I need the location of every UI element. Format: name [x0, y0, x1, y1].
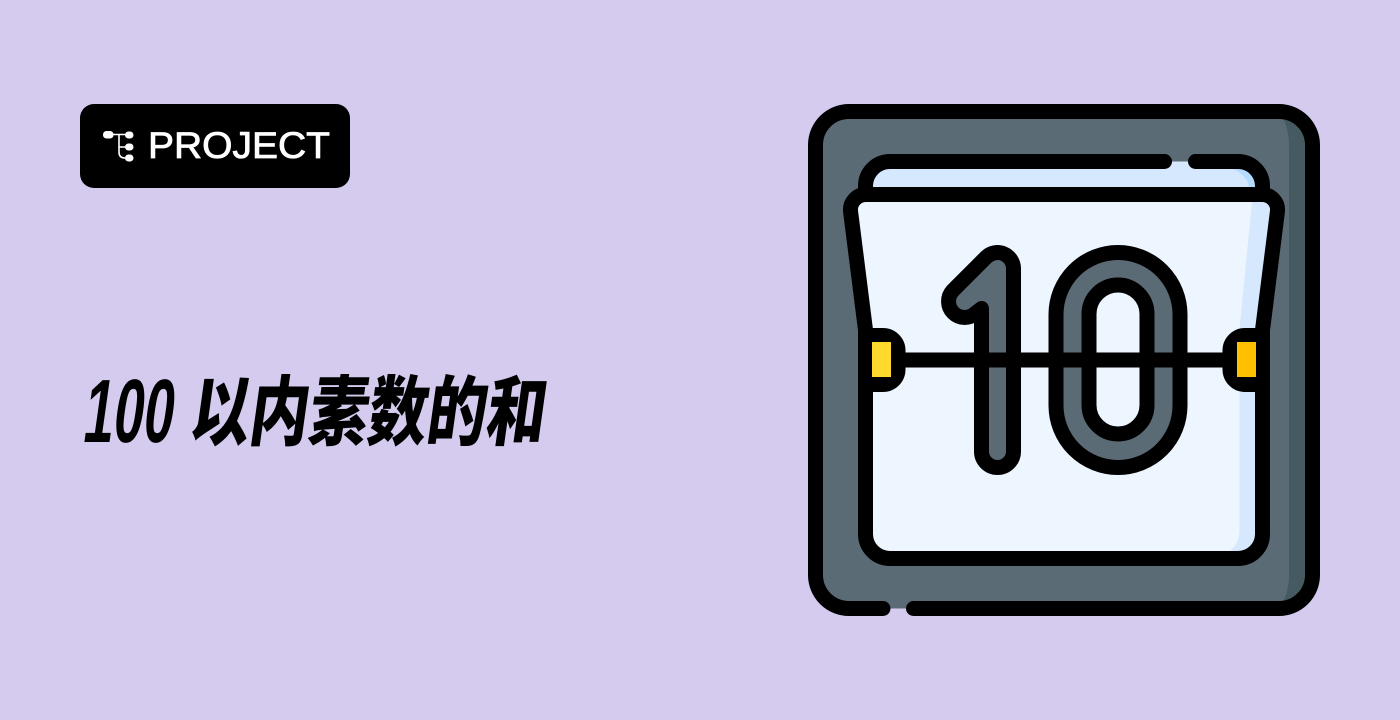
back page	[866, 162, 1262, 199]
icon: flip calendar showing 10	[808, 104, 1320, 616]
left clip	[866, 336, 898, 384]
icon: project tree	[103, 131, 134, 162]
digit 1	[949, 253, 1014, 468]
title: 以内素数的和	[185, 350, 555, 461]
badge: PROJECT label	[80, 104, 350, 188]
digit 0	[1056, 252, 1180, 468]
frame	[816, 112, 1312, 608]
badge text: PROJECT	[148, 125, 330, 166]
right clip	[1230, 336, 1262, 384]
front page	[850, 194, 1278, 558]
title: 100	[78, 361, 182, 462]
hinge line	[898, 352, 1230, 368]
